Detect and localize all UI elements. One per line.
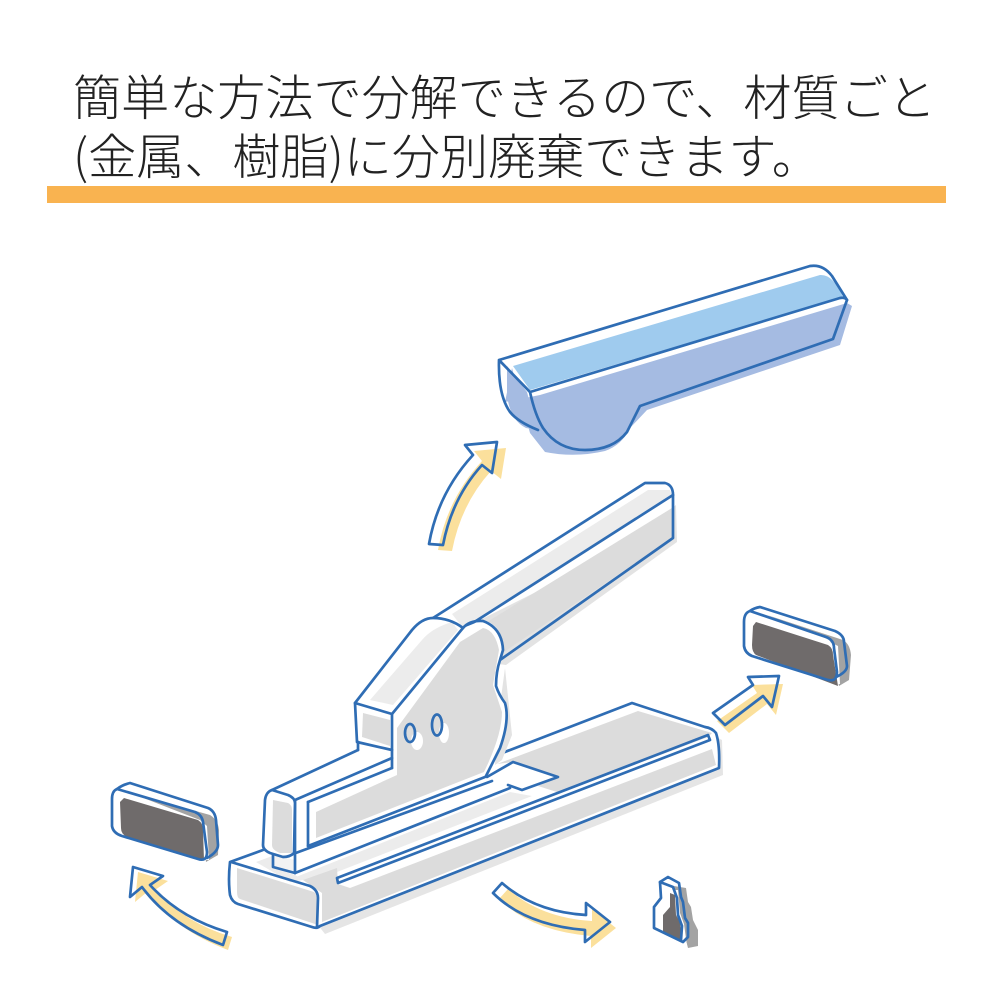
- slot window panel: [487, 762, 558, 790]
- arrow: to right end piece: [713, 676, 783, 733]
- heading underline bar: [47, 186, 946, 203]
- arrow: up to cover: [429, 442, 506, 551]
- stapler handle: [433, 483, 677, 665]
- stapler magazine: [263, 750, 510, 873]
- right end magnet piece: [744, 607, 851, 686]
- stapler head with side plate: [272, 618, 512, 853]
- title: [73, 59, 936, 188]
- arrow: to fragment: [493, 883, 616, 948]
- stapler base: [229, 703, 723, 934]
- removed blue handle cover: [499, 266, 852, 455]
- removed small metal fragment: [654, 877, 698, 948]
- title: 簡単な方法で分解できるので、材質ごと: [73, 59, 936, 129]
- left end magnet piece: [112, 783, 219, 862]
- title: (金属、樹脂)に分別廃棄できます。: [73, 118, 820, 188]
- arrow: to left end piece: [130, 867, 232, 950]
